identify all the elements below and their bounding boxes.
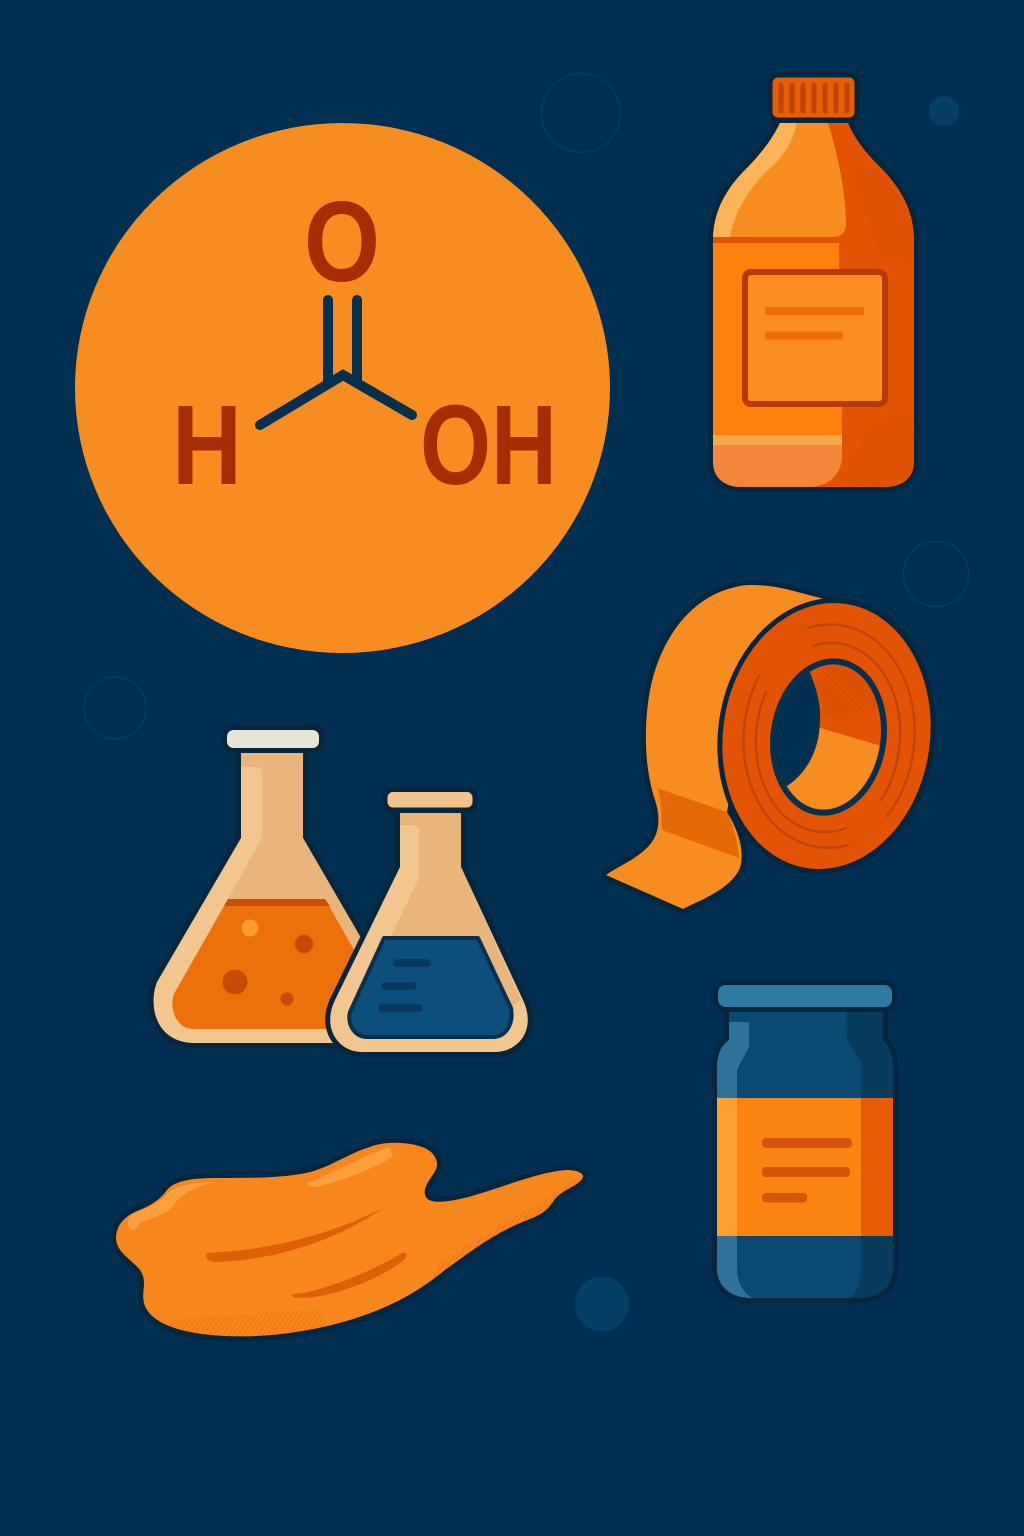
small flask body xyxy=(330,813,528,1052)
jar right shade xyxy=(846,1012,893,1298)
core opening xyxy=(776,672,820,786)
smear highlights xyxy=(128,1147,393,1230)
orange bottle icon xyxy=(700,75,930,500)
large flask liquid surface xyxy=(224,899,330,906)
formic acid molecule icon xyxy=(75,123,610,653)
jar label shaded strip xyxy=(861,1098,893,1236)
bottle shoulder band xyxy=(713,237,714,239)
jar left highlight xyxy=(717,1022,752,1298)
decorative dot bottom xyxy=(575,1277,629,1331)
jar label xyxy=(717,1098,893,1236)
decorative dot top right xyxy=(929,96,959,126)
small flask shade xyxy=(390,813,521,1008)
large flask bubbles xyxy=(222,920,313,1006)
bottle label lines xyxy=(765,311,864,336)
smear hatching xyxy=(165,1178,590,1345)
small flask xyxy=(330,790,528,1052)
bottle upper panel xyxy=(730,123,846,237)
small flask outline xyxy=(330,813,528,1052)
tape core interior xyxy=(776,665,880,810)
tape shaded strip xyxy=(657,788,739,858)
decorative ring left xyxy=(84,677,146,739)
bottle lower band xyxy=(705,435,842,445)
large flask xyxy=(154,728,375,1043)
oxygen label: O xyxy=(304,179,380,306)
small flask liquid xyxy=(349,938,512,1037)
small flask marks xyxy=(382,963,427,1008)
smear creases xyxy=(206,1208,407,1298)
large flask body xyxy=(154,753,375,1043)
jar label lines xyxy=(762,1138,852,1202)
tape roll icon xyxy=(606,585,950,909)
bottle hatching xyxy=(840,167,914,487)
hydroxyl label: OH xyxy=(420,382,557,508)
tape rings xyxy=(744,624,915,848)
core shading hatch xyxy=(816,665,879,715)
tape core rim xyxy=(763,654,894,820)
tape strip xyxy=(606,585,828,909)
small flask rim xyxy=(385,790,475,810)
bottle label xyxy=(745,272,885,404)
bottle layers xyxy=(713,123,914,487)
hydrogen label: H xyxy=(172,382,242,508)
tape roll face xyxy=(703,587,950,885)
bottle cap xyxy=(770,75,857,120)
flasks icon xyxy=(154,728,528,1052)
molecule bonds xyxy=(260,300,412,425)
jar layers xyxy=(717,1012,893,1298)
large flask shade xyxy=(228,753,362,948)
bottle highlight xyxy=(713,123,796,237)
core shaded wall xyxy=(810,664,881,746)
cap ridges xyxy=(781,85,847,111)
smear body xyxy=(116,1143,583,1336)
bottle body outline xyxy=(713,123,914,487)
bottle base panel xyxy=(705,445,842,487)
large flask outline xyxy=(154,753,375,1043)
decorative ring right xyxy=(904,542,968,606)
smear outline xyxy=(116,1143,583,1336)
decorative ring top xyxy=(542,74,620,152)
jar label light strip xyxy=(717,1098,737,1236)
jar base colour xyxy=(717,1012,893,1298)
jar outline xyxy=(717,1012,893,1298)
large flask liquid xyxy=(172,899,375,1029)
jar lid xyxy=(716,982,894,1010)
large flask rim xyxy=(224,728,322,750)
jar icon xyxy=(710,982,900,1305)
bottle middle panel xyxy=(705,243,842,435)
orange paste smear icon xyxy=(116,1143,590,1345)
infographic canvas xyxy=(75,72,969,1342)
